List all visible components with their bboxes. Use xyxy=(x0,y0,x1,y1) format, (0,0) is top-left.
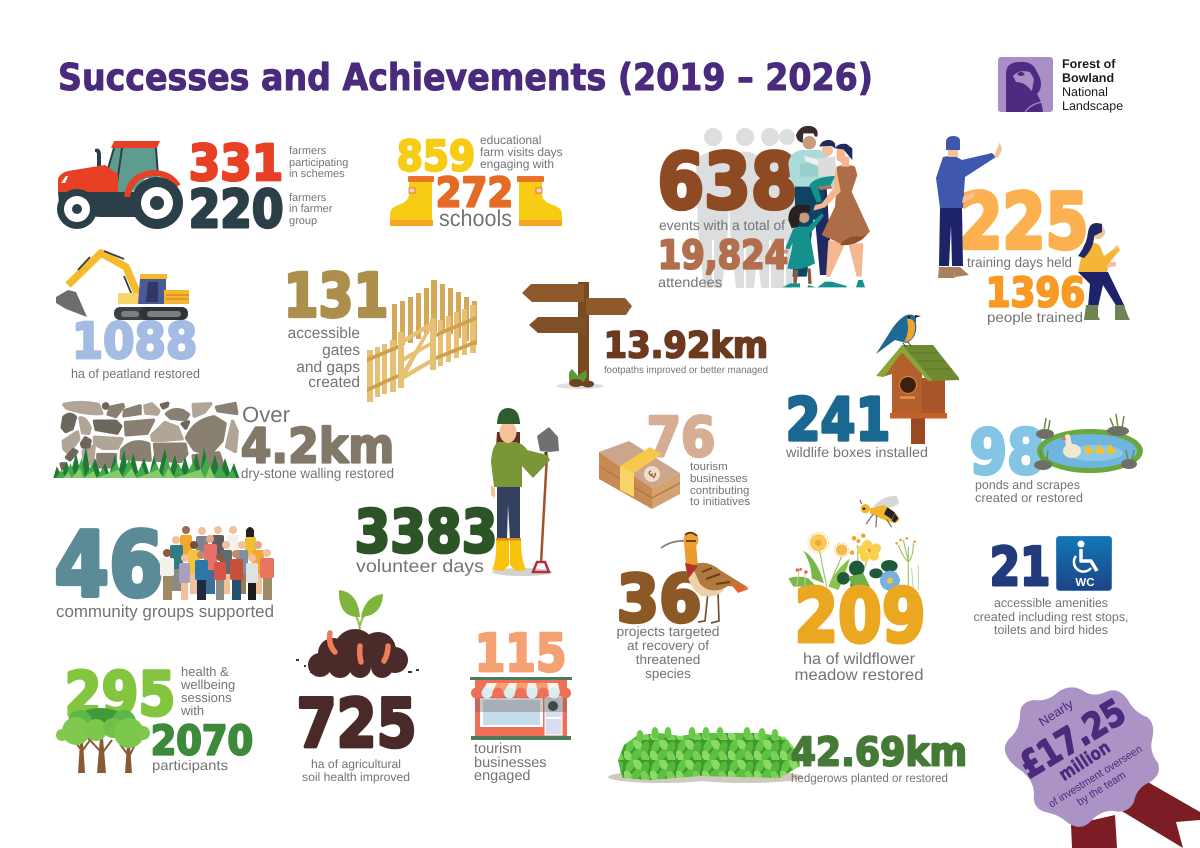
number: 638: 638 xyxy=(658,138,798,227)
label: footpaths improved or better managed: footpaths improved or better managed xyxy=(604,365,768,376)
icon: signpost xyxy=(522,282,632,389)
label: projects targeted at recovery of threatened species: threatened xyxy=(636,652,700,667)
label: of investment overseen: of investment overseen xyxy=(1047,743,1145,811)
panel: gates xyxy=(284,262,477,402)
number: 241: 241 xyxy=(786,385,890,454)
label: attendees: attendees xyxy=(658,274,722,290)
label: educational farm visits days engaging with: engaging with xyxy=(480,157,554,171)
panel: soil health xyxy=(296,590,419,784)
panel: accessible amenities xyxy=(974,536,1128,637)
label: health & wellbeing sessions with: sessions xyxy=(181,690,232,705)
logo: Forest of Bowland National Landscape: National xyxy=(1062,85,1108,99)
label: dry-stone walling restored: dry-stone walling restored xyxy=(241,465,394,481)
label: projects targeted at recovery of threatened species: projects targeted xyxy=(616,624,720,639)
icon: family xyxy=(783,126,870,287)
label: farmers participating in schemes: farmers xyxy=(289,145,327,157)
icon: accessible WC sign xyxy=(1056,536,1112,590)
panel: community groups xyxy=(54,513,274,621)
label: community groups supported: community groups supported xyxy=(56,602,274,621)
label: wildlife boxes installed: wildlife boxes installed xyxy=(785,444,928,460)
label: tourism businesses engaged: businesses xyxy=(474,755,547,771)
number: 3383: 3383 xyxy=(355,497,497,566)
number: 1088: 1088 xyxy=(72,312,197,370)
icon: rosette badge xyxy=(1005,687,1159,827)
number: 272: 272 xyxy=(436,168,513,216)
number: 42.69km: 42.69km xyxy=(791,730,967,776)
panel: tourism businesses engaged xyxy=(470,624,572,784)
label: tourism businesses engaged: tourism xyxy=(474,741,522,757)
icon: stone wall with grass xyxy=(53,403,239,478)
label: accessible gates and gaps created: accessible xyxy=(288,325,360,342)
panel: events xyxy=(658,126,870,290)
panel: threatened species projects xyxy=(616,532,749,681)
icon: bird box with bird xyxy=(876,314,959,444)
number: £17.25: £17.25 xyxy=(1012,692,1133,787)
label: volunteer days: volunteer days xyxy=(356,556,484,576)
number: 21: 21 xyxy=(990,537,1050,598)
icon: crowd silhouettes xyxy=(696,128,799,288)
panel: farmers xyxy=(57,134,348,240)
label: ha of agricultural soil health improved: soil health improved xyxy=(302,770,410,784)
icon: accessible WC sign: WC xyxy=(1075,577,1095,589)
label: hedgerows planted or restored: hedgerows planted or restored xyxy=(791,771,948,785)
number: 331: 331 xyxy=(189,134,283,192)
icon: sitting woman xyxy=(1078,223,1130,320)
icon: pointing man xyxy=(936,136,1002,278)
label: tourism businesses contributing to initiatives: contributing xyxy=(690,485,749,497)
label: Nearly: Nearly xyxy=(1036,696,1076,729)
label: accessible amenities created including rest stops, toilets and bird hides: accessible amenities xyxy=(994,596,1108,610)
number: 4.2km: 4.2km xyxy=(241,418,394,474)
label: tourism businesses engaged: engaged xyxy=(474,768,530,784)
number: 13.92km: 13.92km xyxy=(604,326,768,367)
label: by the team: by the team xyxy=(1075,769,1128,809)
label: ha of wildflower meadow restored: ha of wildflower xyxy=(803,651,916,668)
label: accessible gates and gaps created: and gaps xyxy=(296,359,360,376)
icon: hedge xyxy=(608,727,803,783)
label: health & wellbeing sessions with: wellbeing xyxy=(180,677,235,692)
icon: tractor xyxy=(57,141,183,229)
number: 76: 76 xyxy=(647,405,715,469)
number: 209: 209 xyxy=(794,573,926,659)
panel: educational farm visits xyxy=(390,131,563,231)
panel: health and wellbeing xyxy=(56,660,253,773)
number: 19,824: 19,824 xyxy=(658,232,788,278)
label: educational farm visits days engaging with: farm visits days xyxy=(480,145,563,159)
panel: training xyxy=(936,136,1130,325)
label: people trained: people trained xyxy=(987,309,1083,325)
number: 36: 36 xyxy=(617,562,702,638)
label: ponds and scrapes created or restored: ponds and scrapes xyxy=(975,478,1080,492)
panel: ponds xyxy=(970,414,1143,505)
panel: tourism businesses contributing xyxy=(599,405,750,509)
panel: dry-stone walling xyxy=(53,402,394,481)
number: 1396: 1396 xyxy=(986,268,1085,316)
panel: peatland xyxy=(56,251,200,381)
label: ha of agricultural soil health improved: ha of agricultural xyxy=(311,757,401,771)
number: 2070: 2070 xyxy=(151,716,253,764)
icon: ribbon tails xyxy=(1071,777,1200,848)
number: 220: 220 xyxy=(189,180,283,240)
label: ponds and scrapes created or restored: created or restored xyxy=(975,491,1083,505)
panel: footpaths xyxy=(522,282,768,389)
number: 46: 46 xyxy=(54,513,164,617)
label: projects targeted at recovery of threatened species: species xyxy=(645,666,691,681)
title: Successes and Achievements (2019 – 2026) xyxy=(58,56,873,99)
icon: crowd of people xyxy=(160,526,274,600)
label: farmers in farmer group: group xyxy=(289,215,317,227)
label: participants: participants xyxy=(152,757,228,773)
icon: curlew bird xyxy=(661,532,749,623)
label: farmers in farmer group: farmers xyxy=(289,192,327,204)
number: 98: 98 xyxy=(970,416,1045,489)
logo: Forest of Bowland National Landscape: Forest of xyxy=(1062,57,1116,71)
panel: investment rosette xyxy=(1005,687,1200,848)
label: farmers in farmer group: in farmer xyxy=(289,203,333,215)
number: 725: 725 xyxy=(297,684,417,762)
label: health & wellbeing sessions with: health & xyxy=(181,664,229,679)
icon: sprout and soil with worms xyxy=(296,590,419,678)
label: Over: Over xyxy=(242,402,290,427)
icon: bee xyxy=(860,496,899,527)
icon: wooden fence and gate xyxy=(367,280,477,402)
panel: wildlife boxes xyxy=(785,314,959,460)
panel: volunteer days xyxy=(355,408,559,576)
label: farmers participating in schemes: participating xyxy=(289,157,348,169)
label: accessible gates and gaps created: gates xyxy=(322,342,360,359)
label: accessible gates and gaps created: created xyxy=(308,374,360,391)
number: 859: 859 xyxy=(397,131,475,180)
icon: left boot xyxy=(390,176,434,226)
number: 115: 115 xyxy=(475,624,566,684)
number: 295: 295 xyxy=(65,660,175,730)
label: events with a total of: events with a total of xyxy=(659,217,785,233)
number: 225: 225 xyxy=(960,178,1088,267)
label: ha of wildflower meadow restored: meadow restored xyxy=(794,667,924,684)
label: tourism businesses contributing to initiatives: businesses xyxy=(690,473,748,485)
icon: shop front xyxy=(470,677,572,740)
label: educational farm visits days engaging with: educational xyxy=(480,133,541,147)
label: tourism businesses contributing to initiatives: to initiatives xyxy=(690,496,750,508)
label: tourism businesses contributing to initiatives: tourism xyxy=(690,461,728,473)
icon: pond with ducks xyxy=(1034,414,1143,473)
label: schools: schools xyxy=(439,205,512,231)
icon: stack of banknotes xyxy=(599,441,680,509)
icon: woman with spade xyxy=(491,408,559,576)
panel: hedgerows xyxy=(608,727,967,785)
icon: right boot xyxy=(517,176,562,226)
label: ha of peatland restored: ha of peatland restored xyxy=(71,366,200,381)
label: farmers participating in schemes: in schemes xyxy=(289,168,345,180)
icon: stack of banknotes: £ xyxy=(646,469,660,480)
icon: wildflowers xyxy=(788,532,918,591)
logo: Forest of Bowland National Landscape: Bowland xyxy=(1062,71,1114,85)
panel: wildflower meadow xyxy=(788,496,926,684)
label: million: million xyxy=(1055,737,1114,786)
icon: trees xyxy=(56,708,150,773)
label: accessible amenities created including rest stops, toilets and bird hides: created including rest stops, xyxy=(974,610,1128,624)
logo: Forest of Bowland National Landscape xyxy=(998,57,1123,113)
label: health & wellbeing sessions with: with xyxy=(180,703,204,718)
label: projects targeted at recovery of threatened species: at recovery of xyxy=(627,638,709,653)
label: accessible amenities created including rest stops, toilets and bird hides: toilets and bird hides xyxy=(994,623,1108,637)
label: training days held: training days held xyxy=(967,254,1072,270)
number: 131: 131 xyxy=(284,262,388,332)
logo: Forest of Bowland National Landscape: Landscape xyxy=(1062,99,1123,113)
icon: excavator xyxy=(56,251,189,320)
